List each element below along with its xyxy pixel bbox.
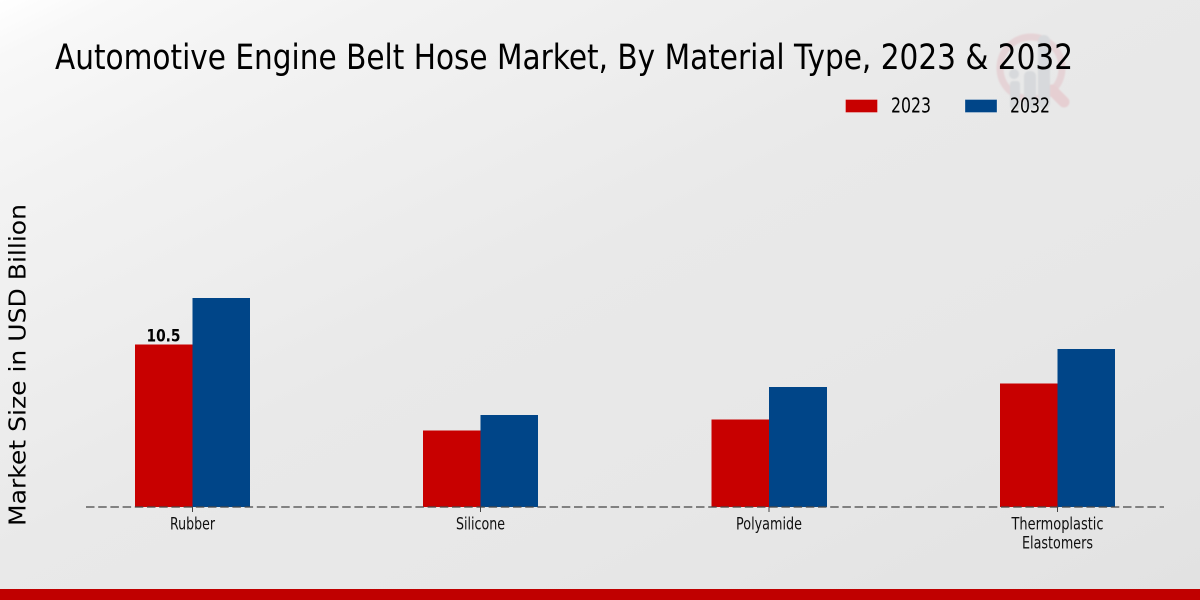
category label: Thermoplastic Elastomers <box>1011 514 1104 552</box>
legend <box>846 94 1050 118</box>
icon: watermark logo <box>1000 35 1064 109</box>
x-axis baseline <box>86 506 1164 508</box>
y-axis label: Market Size in USD Billion <box>4 204 32 526</box>
bar group: Thermoplastic Elastomers <box>1000 349 1115 507</box>
legend item: 2023 <box>846 94 931 118</box>
legend item: 2032 <box>965 94 1050 118</box>
category label: Rubber: Rubber <box>170 514 215 534</box>
bar group: Polyamide <box>712 387 827 507</box>
bar group: Silicone <box>423 415 538 507</box>
category label: Silicone: Silicone <box>456 514 505 534</box>
data label: 10.5: 10.5 <box>146 326 180 346</box>
category label: Polyamide: Polyamide <box>736 514 802 534</box>
footer bar <box>0 589 1200 600</box>
category label: Thermoplastic Elastomers: Thermoplastic <box>1011 514 1104 534</box>
legend item: 2032: 2032 <box>1010 94 1050 118</box>
category label: Thermoplastic Elastomers: Elastomers <box>1022 534 1093 552</box>
bar chart <box>86 298 1164 552</box>
bar group: Rubber <box>135 298 250 507</box>
legend item: 2023: 2023 <box>891 94 931 118</box>
